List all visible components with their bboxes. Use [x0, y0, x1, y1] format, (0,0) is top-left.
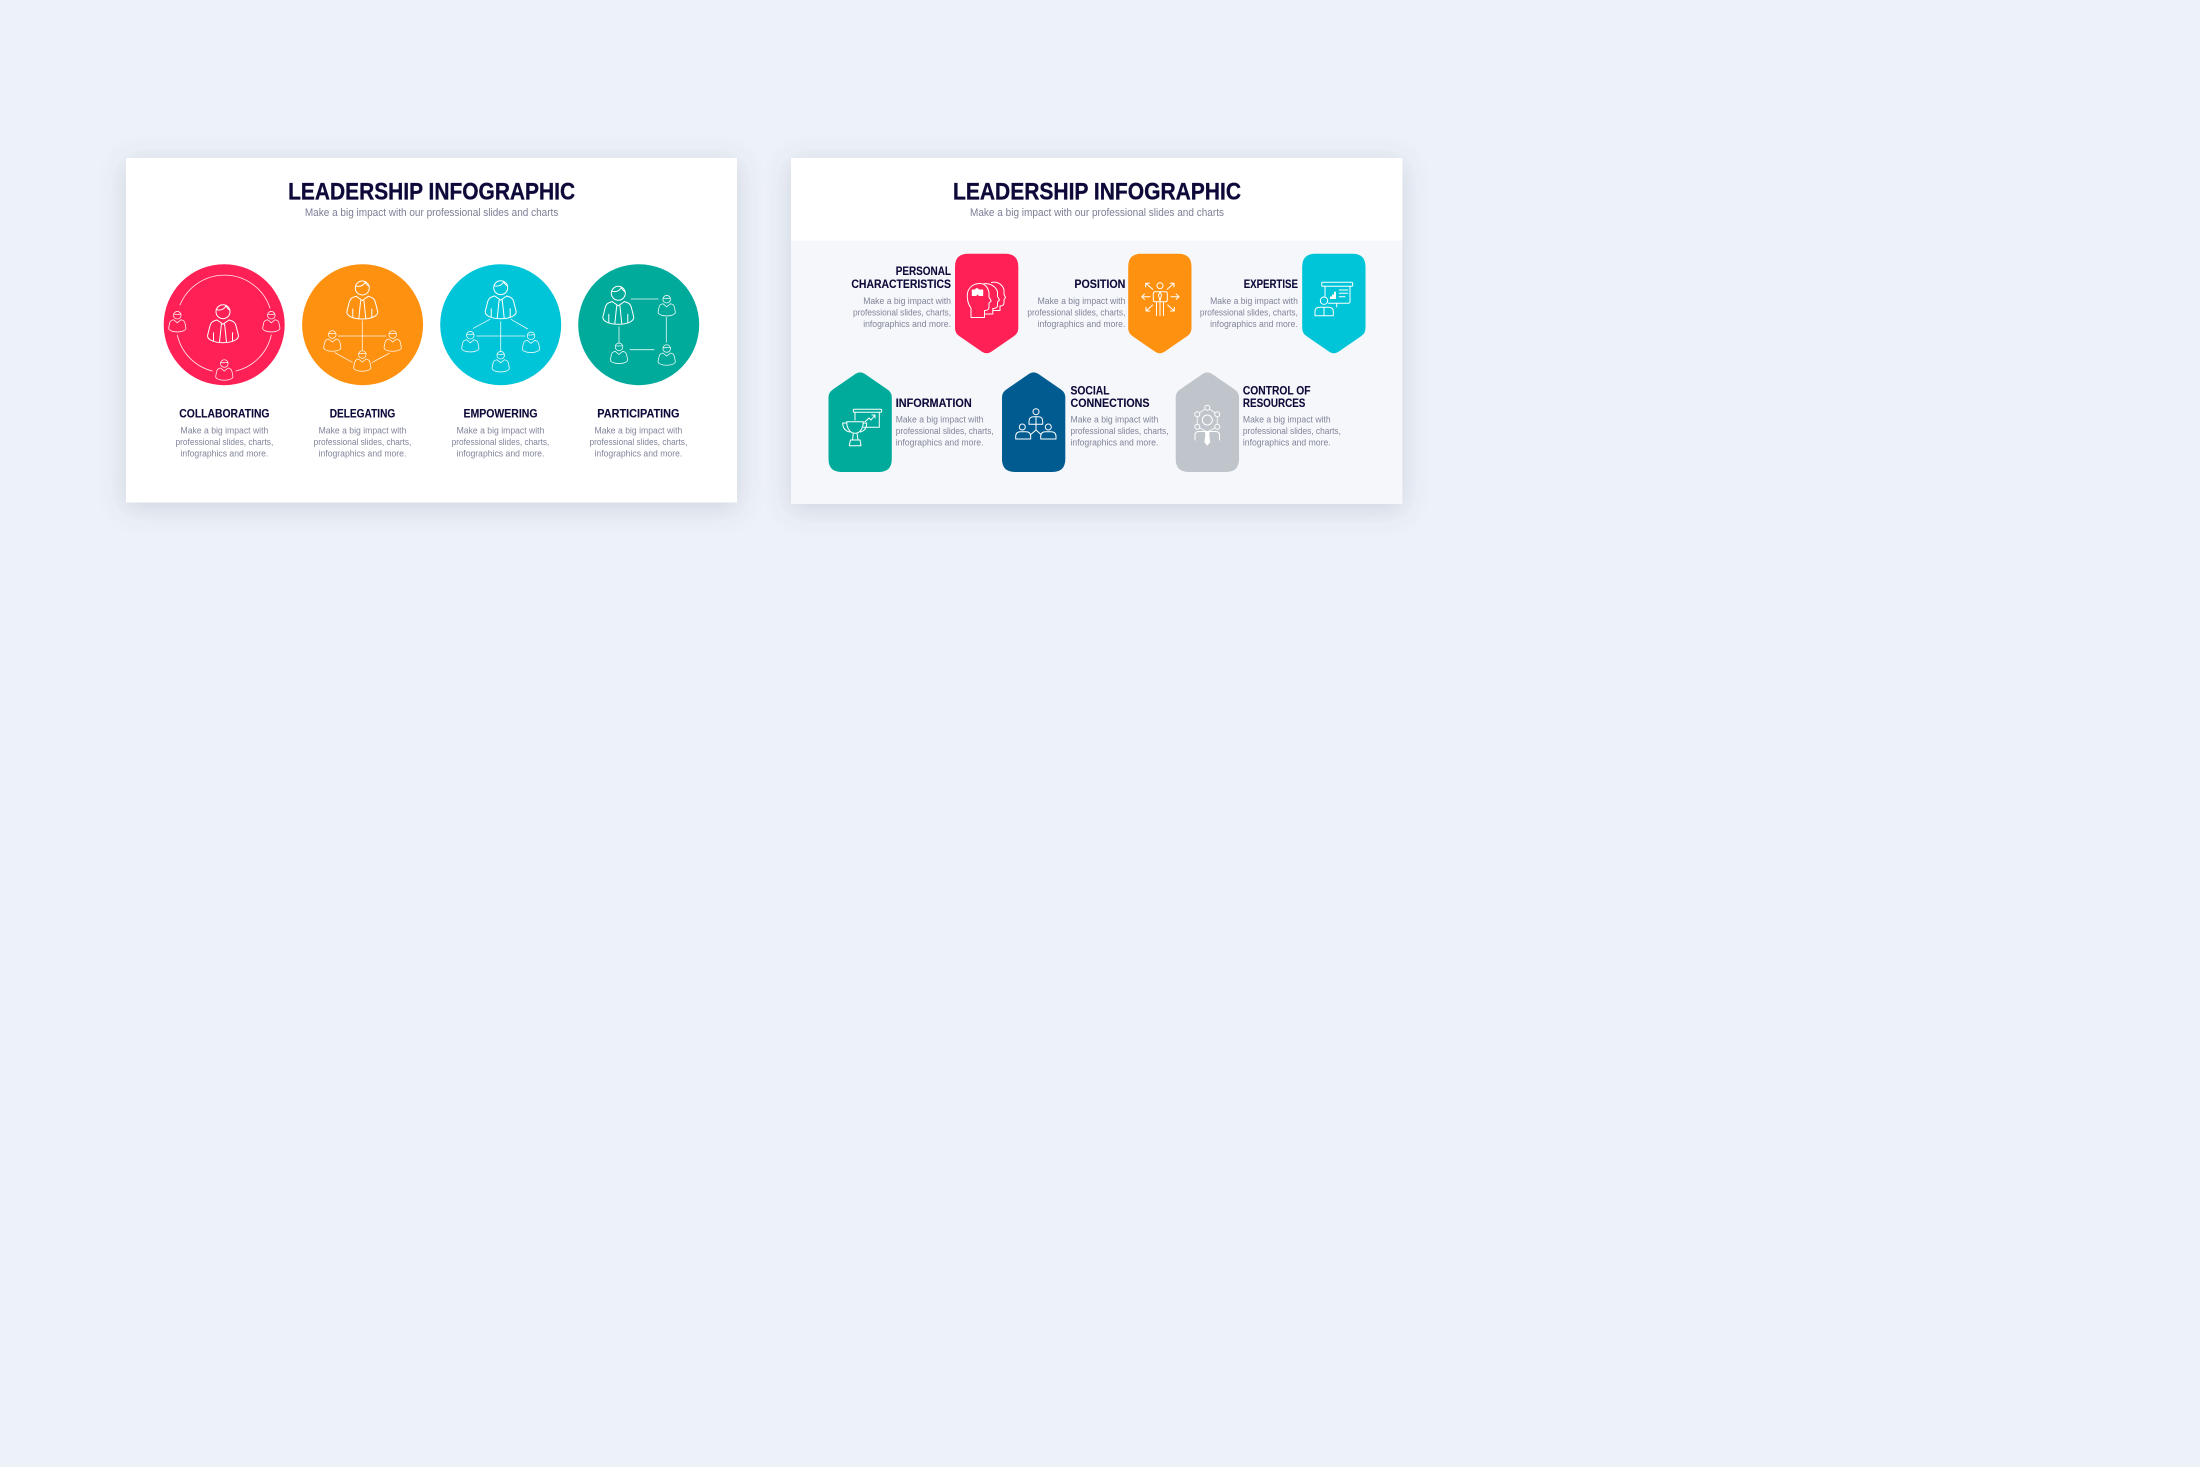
text: control of resources: infographics and more. [1243, 438, 1331, 448]
label: participating: infographics and more. [594, 448, 682, 458]
text: information: infographics and more. [896, 438, 984, 448]
text: social connections: professional slides, charts, [1070, 426, 1168, 436]
text: personal characteristics: Make a big impact with [863, 296, 951, 306]
label: participating [590, 407, 687, 458]
icon: participating square [603, 286, 675, 365]
text: personal characteristics: infographics and more. [863, 319, 951, 329]
label: empowering: EMPOWERING [464, 407, 538, 421]
text: expertise: EXPERTISE [1244, 277, 1298, 291]
badge: expertise [1302, 254, 1366, 353]
circle: participating [578, 264, 699, 385]
badge: personal characteristics [955, 254, 1018, 353]
text: expertise [1200, 277, 1298, 329]
badge: control of resources [1176, 372, 1239, 472]
label: collaborating: Make a big impact with [180, 425, 268, 435]
text: information: professional slides, charts, [896, 426, 994, 436]
label: collaborating: COLLABORATING [179, 407, 270, 421]
circle: empowering [440, 264, 561, 385]
text: position [1027, 277, 1125, 329]
label: empowering: professional slides, charts, [452, 437, 549, 447]
label: participating: PARTICIPATING [597, 407, 680, 421]
text: information: Make a big impact with [896, 414, 984, 424]
label: empowering: Make a big impact with [457, 425, 544, 435]
subtitle: Make a big impact with our professional slides and charts [305, 207, 558, 219]
text: position: infographics and more. [1038, 319, 1125, 329]
panel: sources of power [791, 158, 1402, 504]
text: expertise: Make a big impact with [1210, 296, 1298, 306]
icon: heads with puzzle piece [967, 282, 1006, 318]
icon: resource network and tie [1195, 405, 1220, 445]
text: expertise: professional slides, charts, [1200, 308, 1298, 318]
text: position: professional slides, charts, [1027, 308, 1125, 318]
circle: collaborating [164, 264, 285, 385]
label: participating: Make a big impact with [594, 425, 682, 435]
text: social connections: SOCIAL [1070, 383, 1110, 397]
text: control of resources: RESOURCES [1243, 396, 1305, 410]
label: participating: professional slides, charts, [590, 437, 687, 447]
text: social connections [1070, 383, 1168, 448]
text: social connections: infographics and more. [1070, 438, 1158, 448]
circle: delegating [302, 264, 423, 385]
title: LEADERSHIP INFOGRAPHIC [288, 178, 575, 205]
panel: leadership styles [126, 158, 737, 502]
label: delegating: infographics and more. [319, 448, 406, 458]
badge: social connections [1002, 372, 1065, 472]
text: control of resources: professional slides, charts, [1243, 426, 1341, 436]
label: collaborating [176, 407, 273, 458]
badge: information [828, 372, 892, 472]
icon: leader with radiating arrows [1142, 283, 1179, 316]
icon: empowered team [462, 281, 540, 372]
text: personal characteristics: PERSONAL [896, 264, 951, 278]
text: social connections: CONNECTIONS [1070, 396, 1150, 410]
text: control of resources: Make a big impact with [1243, 414, 1331, 424]
text: personal characteristics: professional slides, charts, [853, 308, 951, 318]
text: position: POSITION [1074, 277, 1125, 291]
label: delegating [314, 407, 411, 458]
label: collaborating: infographics and more. [180, 448, 268, 458]
title: LEADERSHIP INFOGRAPHIC [953, 178, 1241, 205]
text: information: INFORMATION [896, 396, 972, 410]
text: position: Make a big impact with [1038, 296, 1125, 306]
icon: leader ringed by team [169, 275, 280, 380]
label: delegating: Make a big impact with [319, 425, 406, 435]
label: delegating: professional slides, charts, [314, 437, 411, 447]
text: personal characteristics [851, 264, 951, 329]
text: personal characteristics: CHARACTERISTICS [851, 277, 951, 291]
label: delegating: DELEGATING [330, 407, 395, 421]
icon: connected people [1016, 409, 1056, 439]
text: information [896, 396, 994, 448]
icon: trophy and growth board [843, 409, 882, 446]
label: empowering: infographics and more. [457, 448, 544, 458]
icon: top-down delegation [324, 281, 401, 371]
text: social connections: Make a big impact with [1070, 414, 1158, 424]
subtitle: Make a big impact with our professional slides and charts [970, 207, 1224, 219]
label: empowering [452, 407, 549, 458]
text: control of resources [1243, 383, 1341, 448]
label: collaborating: professional slides, charts, [176, 437, 273, 447]
icon: presenter with board [1315, 282, 1353, 316]
badge: position [1128, 254, 1192, 353]
text: expertise: infographics and more. [1210, 319, 1298, 329]
text: control of resources: CONTROL OF [1243, 383, 1310, 397]
